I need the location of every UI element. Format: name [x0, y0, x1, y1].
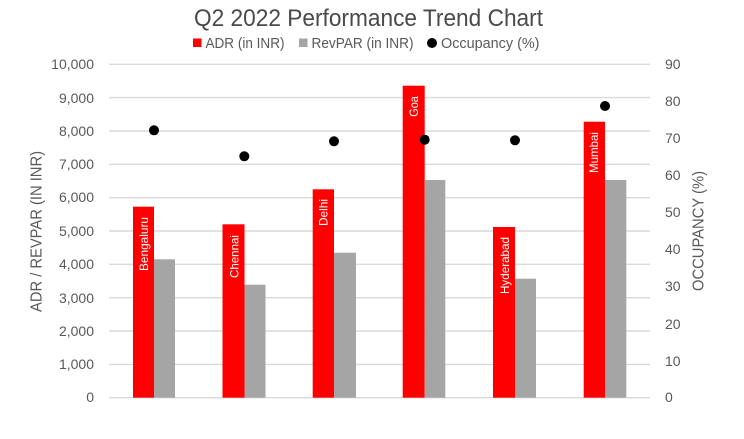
right axis labels: 80	[665, 93, 681, 109]
left axis labels: 0	[86, 389, 94, 405]
right axis labels: 0	[665, 389, 673, 405]
group: Goa bars	[403, 86, 445, 398]
group: Delhi bars: Delhi	[316, 199, 330, 226]
right axis labels: 60	[665, 167, 681, 183]
group: Hyderabad bars	[493, 227, 536, 398]
left axis labels: 6,000	[59, 189, 94, 205]
legend item: ADR: ADR (in INR)	[206, 35, 284, 52]
group: Mumbai bars	[584, 122, 626, 398]
right axis labels: 70	[665, 130, 681, 146]
group: Bengaluru bars	[133, 207, 175, 398]
left axis labels: 3,000	[59, 290, 94, 306]
left axis labels: 7,000	[59, 156, 94, 172]
group: Bengaluru bars: Bengaluru	[137, 217, 151, 271]
group: Hyderabad bars: Hyderabad	[498, 237, 512, 294]
right axis labels: 30	[665, 278, 681, 294]
title: Q2 2022 Performance Trend Chart	[194, 5, 543, 32]
left axis labels	[51, 56, 94, 405]
left axis labels: 8,000	[59, 123, 94, 139]
right axis labels: 40	[665, 241, 681, 257]
legend item: Occupancy: Occupancy (%)	[441, 35, 540, 52]
right axis labels	[665, 56, 681, 405]
right axis labels: 90	[665, 56, 681, 72]
left axis title: ADR / REVPAR (IN INR)	[28, 151, 46, 312]
legend item: RevPAR: RevPAR (in INR)	[312, 35, 414, 52]
group: Chennai bars: Chennai	[227, 235, 241, 278]
left axis labels: 5,000	[59, 223, 94, 239]
right axis title: OCCUPANCY (%)	[690, 171, 708, 291]
left axis labels: 4,000	[59, 256, 94, 272]
left axis labels: 2,000	[59, 323, 94, 339]
left axis labels: 1,000	[59, 356, 94, 372]
legend	[193, 35, 540, 52]
group: Chennai bars	[222, 224, 266, 398]
group: Goa bars: Goa	[407, 96, 421, 117]
left axis labels: 10,000	[51, 56, 94, 72]
group: Mumbai bars: Mumbai	[587, 132, 601, 173]
group: Delhi bars	[313, 189, 356, 398]
right axis labels: 10	[665, 353, 681, 369]
occupancy dots	[149, 101, 610, 161]
right axis labels: 50	[665, 204, 681, 220]
left axis labels: 9,000	[59, 90, 94, 106]
right axis labels: 20	[665, 316, 681, 332]
